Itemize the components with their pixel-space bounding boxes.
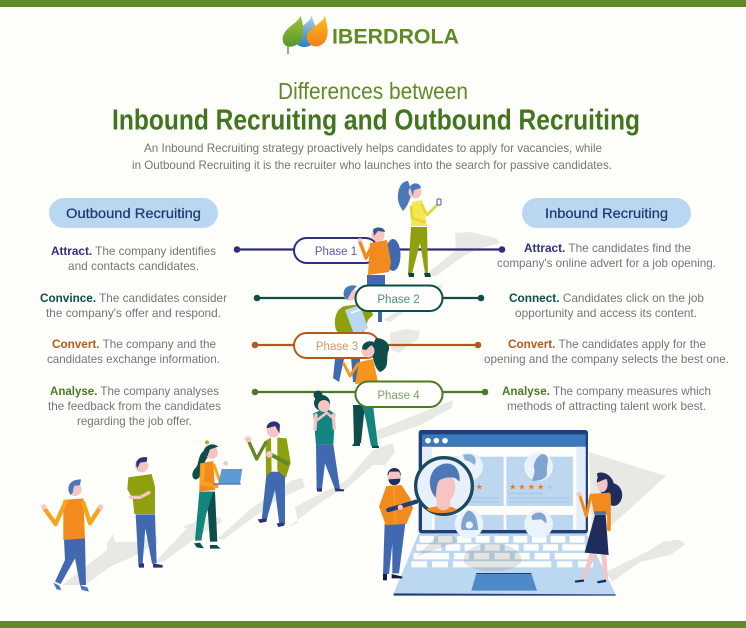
- inbound text: Connect: opportunity and access its content.: [515, 307, 697, 320]
- Phase 4 pill: [356, 382, 442, 407]
- intro paragraph: in Outbound Recruiting it is the recruiter who launches into the search for passive candidates.: [132, 159, 612, 172]
- rating stars: ★: [537, 482, 544, 491]
- top bar: [0, 0, 746, 7]
- laptop screen: [419, 430, 588, 538]
- inbound text: Analyse: [502, 385, 711, 413]
- rating stars: ★: [509, 482, 516, 491]
- heading pill: Outbound Recruiting: Outbound Recruiting: [66, 205, 201, 221]
- intro paragraph: [132, 142, 612, 172]
- inbound text: Connect: [509, 292, 704, 320]
- inbound text: Attract: Attract. The candidates find the: [524, 242, 691, 255]
- inbound text: Connect: Connect. Candidates click on the job: [509, 292, 704, 305]
- Phase 2 pill: Phase 2: [377, 294, 420, 306]
- figure: bearded man: [379, 468, 413, 580]
- rating stars: ★: [528, 482, 535, 491]
- intro paragraph: An Inbound Recruiting strategy proactively helps candidates to apply for vacancies, while: [144, 142, 602, 155]
- Phase 4 connector: line and dots: [252, 389, 488, 395]
- outbound text: Convert: candidates exchange information.: [47, 353, 220, 366]
- Phase 1 connector: line and dots: [234, 246, 505, 253]
- outbound text: Analyse: the feedback from the candidates: [48, 400, 221, 413]
- outbound text: Convince: the company's offer and respond.: [46, 307, 221, 320]
- logo: Iberdrola: [283, 15, 459, 54]
- inbound text: Attract: [497, 242, 716, 270]
- outbound text: Convince: [40, 292, 227, 320]
- figure: woman in orange with long dark hair: [344, 338, 389, 448]
- heading pill: Inbound Recruiting: Inbound Recruiting: [545, 205, 668, 221]
- icon: three leaves: [283, 15, 328, 54]
- outbound text: Convince: Convince. The candidates consider: [40, 292, 227, 305]
- Phase 1 pill: [294, 238, 378, 263]
- icon: magnifying glass with enlarged candidate: [388, 458, 472, 514]
- rating stars: ★: [476, 482, 483, 491]
- figure: woman with laptop: [192, 440, 242, 549]
- inbound text: Analyse: methods of attracting talent work best.: [507, 400, 706, 413]
- figure: man in orange jumper: [41, 479, 103, 592]
- figure: man with backpack: [358, 228, 400, 322]
- title line 1: Differences between: [278, 78, 468, 104]
- Phase 2 pill: [356, 286, 442, 311]
- figure: man with book and green jacket: [333, 285, 373, 382]
- logo wordmark: IBERDROLA: [332, 26, 459, 48]
- ground shadows: [62, 232, 685, 585]
- Phase 1 pill: Phase 1: [315, 246, 357, 258]
- inbound text: Convert: [484, 338, 729, 366]
- outbound text: Convert: Convert. The company and the: [52, 338, 216, 351]
- outbound text: Convert: [47, 338, 220, 366]
- inbound text: Convert: opening and the company selects the best one.: [484, 353, 729, 366]
- inbound text: Convert: Convert. The candidates apply for the: [508, 338, 706, 351]
- laptop base and keyboard: [394, 533, 616, 596]
- inbound text: Attract: company's online advert for a job opening.: [497, 257, 716, 270]
- outbound text: Analyse: regarding the job offer.: [77, 415, 192, 428]
- outbound text: Analyse: [48, 385, 221, 428]
- Phase 2 connector: line and dots: [254, 295, 484, 301]
- rating stars: ★: [546, 482, 554, 491]
- rating stars: ★: [518, 482, 526, 491]
- outbound text: Analyse: Analyse. The company analyses: [50, 385, 219, 398]
- Phase 3 connector: line and dots: [252, 342, 481, 348]
- bottom bar: [0, 621, 746, 628]
- inbound text: Analyse: Analyse. The company measures which: [502, 385, 711, 398]
- Phase 3 pill: Phase 3: [316, 341, 358, 353]
- Phase 3 pill: [294, 333, 379, 358]
- figure: teal woman's head: [314, 390, 330, 412]
- Phase 4 pill: Phase 4: [377, 390, 420, 402]
- figure: woman with phone and ponytail: [398, 181, 441, 277]
- rating stars: [476, 482, 554, 491]
- people walking in a line: [41, 409, 344, 592]
- title: [112, 78, 640, 136]
- outbound text: Attract: Attract. The company identifies: [51, 245, 216, 258]
- heading pill: Outbound Recruiting: [49, 198, 218, 228]
- figure: woman in skirt: [575, 472, 622, 583]
- outbound text: Attract: and contacts candidates.: [68, 260, 199, 273]
- heading pill: Inbound Recruiting: [522, 198, 691, 228]
- outbound text: Attract: [51, 245, 216, 273]
- figure: man in olive shirt: [127, 457, 163, 568]
- title line 2: Inbound Recruiting and Outbound Recruiting: [112, 104, 640, 136]
- figure: woman in teal top: [313, 409, 344, 492]
- illustration: big laptop with people: [379, 430, 622, 596]
- figure: man in green jacket: [245, 421, 291, 527]
